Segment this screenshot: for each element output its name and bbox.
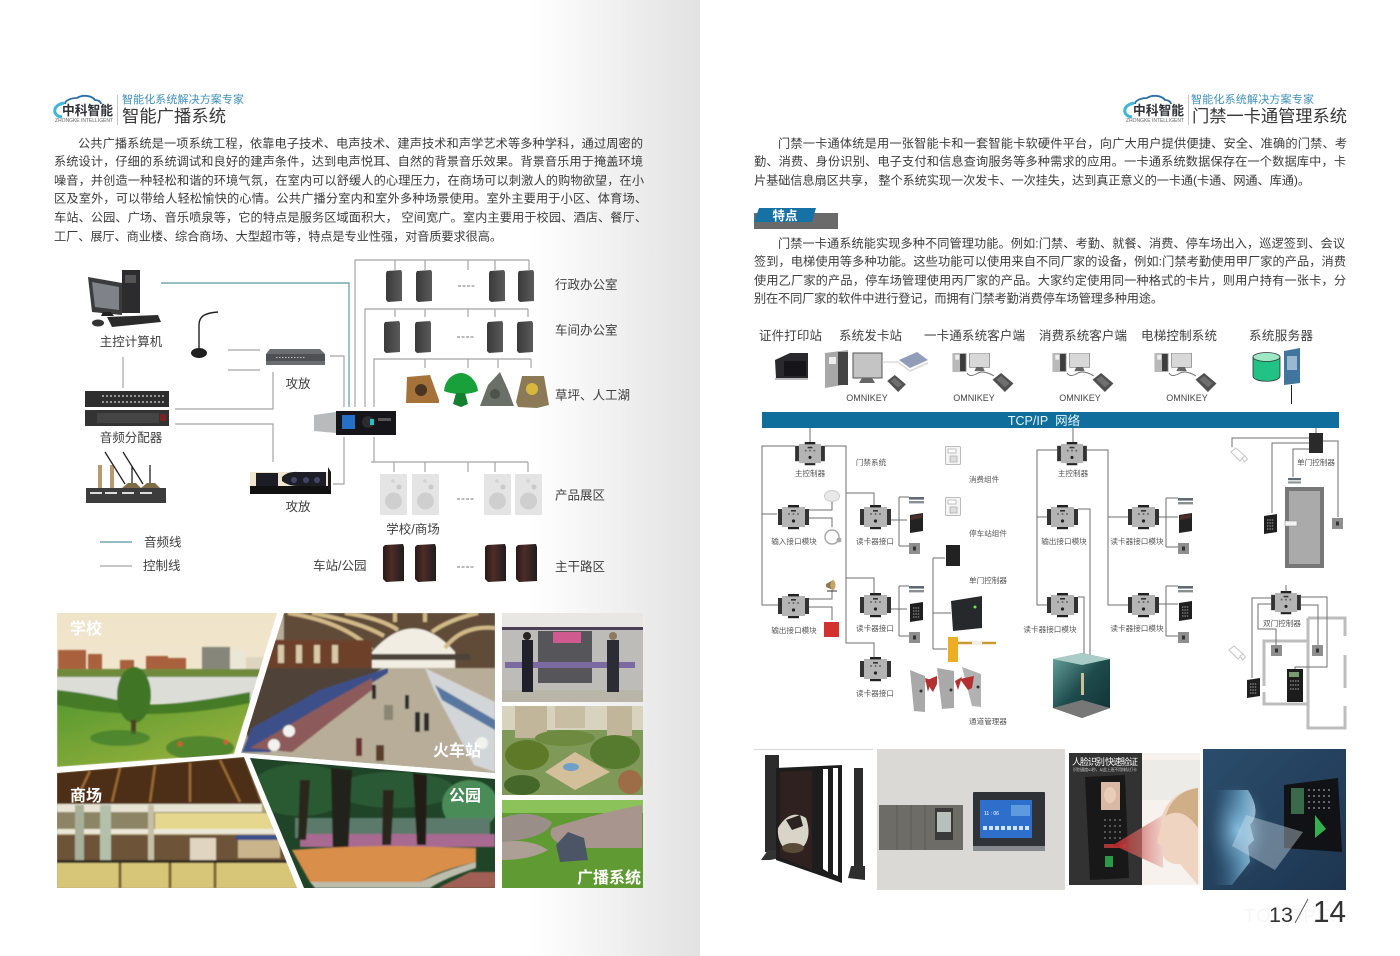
page number — [1269, 894, 1346, 929]
label: workshop office: 车间办公室 — [555, 322, 618, 338]
right logo: 中科智能 — [1125, 95, 1189, 125]
left intro paragraph: 公共广播系统是一项系统工程，依靠电子技术、电声技术、建声技术和声学艺术等多种学科，通过周密的 — [78, 136, 643, 150]
speakers: administration office — [386, 270, 534, 302]
label: access system: 门禁系统 — [856, 457, 887, 467]
photo: swing gate — [754, 749, 873, 883]
label: product showroom: 产品展区 — [555, 488, 605, 502]
photo: biometric device — [1203, 749, 1346, 890]
label: lawn and lake: 草坪、人工湖 — [555, 388, 630, 402]
right intro paragraph: 勤、消费、身份识别、电子支付和信息查询服务等多种需求的应用。一卡通系统数据保存在一个数据库中，卡 — [754, 154, 1346, 168]
label: 公园: 公园 — [449, 788, 481, 805]
page number: 13 — [1269, 903, 1293, 927]
legend: line types: 控制线 — [143, 559, 181, 573]
broadcast system diagram — [85, 260, 630, 582]
icon: camera 2 — [1229, 646, 1246, 660]
station labels: 电梯控制系统 — [1141, 329, 1217, 343]
photo: face recognition terminal: 人脸识别 快速验证 — [1072, 756, 1138, 767]
access control diagram: elevator group — [1023, 428, 1193, 718]
photo: residential garden — [502, 706, 643, 795]
label: output module: 输出接口模块 — [771, 625, 817, 635]
photo: face recognition terminal: 识别速度≤1秒，从此上班不用排队打卡 — [1073, 766, 1137, 772]
label: main computer: 主控计算机 — [100, 334, 163, 349]
controller: reader module bottom — [1128, 593, 1159, 617]
station labels: 证件打印站 — [759, 329, 822, 343]
label: reader interface 1: 读卡器接口 — [856, 536, 894, 546]
left intro paragraph: 噪音，并创造一种轻松和谐的环境气氛，在室内可以舒缓人的心理压力，在商场可以刺激人的购物欲望，在小 — [54, 172, 644, 188]
label: reader module top: 读卡器接口模块 — [1110, 536, 1164, 546]
controller: reader interface 3 — [860, 657, 891, 681]
icon: turnstiles — [910, 667, 981, 712]
right intro paragraph: 片基础信息扇区共享， 整个系统实现一次发卡、一次挂失，达到真正意义的一卡通(卡通、网通、库通)。 — [754, 172, 1310, 188]
left logo: 中科智能: 中科智能 — [62, 103, 113, 118]
icons: input and output peripherals — [824, 490, 842, 637]
speakers: lawn decorations — [406, 372, 549, 408]
double door walls — [1264, 618, 1345, 728]
TCP/IP network band — [762, 412, 1339, 428]
speakers: wood column speakers — [383, 544, 537, 582]
photo collage: application scenes — [57, 613, 643, 889]
panel: right page — [754, 92, 1347, 929]
icon: system server — [1253, 348, 1300, 404]
client stations row — [759, 328, 1313, 404]
label: main controller: 主控制器 — [1058, 468, 1089, 478]
speakers: workshop office — [384, 321, 533, 353]
label: school and mall: 学校/商场 — [386, 522, 440, 536]
label: administration office: 行政办公室 — [555, 277, 618, 292]
label: station and park: 车站/公园 — [313, 558, 366, 573]
photo: shopping mall — [57, 757, 302, 889]
label: 火车站: 火车站 — [433, 741, 481, 760]
icon: central controller — [314, 411, 396, 435]
left intro paragraph: 车站、公园、广场、音乐喷泉等，它的特点是服务区域面积大， 空间宽广。室内主要用于校园、酒店、餐厅、 — [54, 210, 647, 224]
photo: wall control panel — [877, 749, 1065, 890]
left logo: 中科智能: ZHONGKE INTELLIGENT — [55, 118, 114, 124]
icons: double door peripherals — [1247, 645, 1323, 702]
controller: reader module top — [1128, 505, 1159, 529]
TCP/IP network band: TCP/IP 网络 — [1008, 413, 1081, 428]
icon: parking barrier — [948, 637, 996, 662]
label: reader interface 3: 读卡器接口 — [856, 688, 894, 698]
photo: train station — [240, 613, 496, 778]
right intro paragraph — [754, 136, 1347, 188]
legend: line types: 音频线 — [144, 534, 182, 550]
features paragraph: 别在不同厂家的软件中进行登记，而拥有门禁考勤消费停车场管理多种用途。 — [754, 290, 1163, 306]
controller: reader interface 2 — [860, 593, 891, 617]
icons: single door peripherals — [1264, 478, 1343, 534]
single door wiring — [1232, 428, 1338, 517]
icon: card printer — [775, 353, 808, 380]
photo: rock speaker — [502, 800, 643, 888]
icon: single door controller — [1309, 433, 1323, 453]
right title: 门禁一卡通管理系统 — [1192, 106, 1347, 126]
features paragraph: 使用乙厂家的产品，停车场管理使用丙厂家的产品。大家约定使用同一种格式的卡片，则用户持有一张卡，分 — [754, 272, 1346, 288]
icon: door — [1285, 487, 1324, 568]
photo: wall control panel: 11 : 06 — [984, 811, 999, 817]
right logo: 中科智能: ZHONGKE INTELLIGENT — [1126, 118, 1185, 124]
photo: subway platform — [502, 613, 643, 702]
icon: audio splitter — [85, 391, 169, 426]
legend: line types — [100, 534, 182, 573]
icon: card client PC — [952, 353, 1013, 403]
label: consumption components: 消费组件 — [969, 474, 1000, 484]
label: reader module bottom: 读卡器接口模块 — [1110, 623, 1164, 633]
product photos — [754, 749, 1346, 890]
icon: consumption client PC: OMNIKEY — [1059, 393, 1101, 403]
section tag: 特点: 特点 — [772, 208, 798, 223]
label: amplifier 1: 攻放 — [285, 376, 311, 391]
label: single door controller: 单门控制器 — [969, 575, 1007, 585]
station labels: 系统服务器 — [1249, 328, 1313, 343]
label: main road area: 主干路区 — [555, 559, 605, 574]
photo: face recognition terminal — [1069, 753, 1200, 885]
controller: reader module left — [1047, 593, 1078, 617]
controller: main — [795, 442, 825, 465]
station labels: 一卡通系统客户端 — [924, 328, 1025, 343]
section tag: 特点 — [754, 208, 838, 229]
controller: output module — [1047, 505, 1078, 529]
access control diagram: left group — [762, 428, 1007, 726]
label: single door controller: 单门控制器 — [1297, 457, 1335, 467]
label: audio splitter: 音频分配器 — [100, 430, 163, 445]
icon: gooseneck microphone — [191, 312, 218, 358]
features paragraph: 门禁一卡通系统能实现多种不同管理功能。例如:门禁、考勤、就餐、消费、停车场出入，巡逻签到、会议 — [778, 236, 1345, 250]
label: reader interface 2: 读卡器接口 — [856, 623, 894, 633]
icon: camera — [1231, 448, 1248, 462]
label: input module: 输入接口模块 — [771, 536, 817, 546]
label: amplifier 2: 攻放 — [285, 499, 311, 514]
station labels: 消费系统客户端 — [1039, 328, 1127, 343]
icon: wireless microphones — [86, 452, 166, 503]
left title: 智能广播系统 — [122, 106, 226, 126]
photo: school — [57, 613, 277, 768]
icons: consumption terminals — [946, 446, 960, 516]
controller: output module — [778, 594, 809, 618]
wiring — [762, 428, 951, 657]
icon: elevator car — [1053, 653, 1110, 718]
audio line — [161, 283, 349, 407]
label: output module: 输出接口模块 — [1041, 536, 1087, 546]
icon: card issuing PC: OMNIKEY — [846, 393, 888, 403]
left intro paragraph: 区及室外，可以带给人轻松愉快的心情。公共广播分室内和室外多种场景使用。室外主要用于小区、体育场、 — [54, 190, 647, 206]
controller: double door — [1271, 591, 1301, 614]
station labels: 系统发卡站 — [839, 328, 902, 343]
control lines — [123, 260, 531, 484]
controller: reader interface 1 — [860, 505, 891, 529]
features paragraph — [754, 236, 1346, 306]
left intro paragraph: 工厂、展厅、商业楼、综合商场、大型超市等，特点是专业性强，对音质要求很高。 — [54, 228, 502, 244]
label: main controller: 主控制器 — [795, 468, 826, 478]
access control diagram: door examples — [1229, 428, 1345, 728]
right logo: 中科智能: 中科智能 — [1133, 103, 1184, 118]
icons: reader devices — [1178, 498, 1193, 643]
label: double door controller: 双门控制器 — [1263, 618, 1301, 628]
page number: 14 — [1313, 894, 1346, 929]
label: parking components: 停车站组件 — [969, 528, 1007, 538]
icon: parking reader — [946, 545, 960, 566]
photo: park — [250, 758, 498, 889]
controller: main — [1057, 442, 1087, 465]
double door wiring — [1252, 585, 1327, 678]
icon: amplifier 1 — [266, 349, 325, 365]
features paragraph: 签到，电梯使用等多种功能。这些功能可以使用来自不同厂家的设备，例如:门禁考勤使用甲厂家的产品，消费 — [754, 254, 1346, 268]
wiring — [1037, 428, 1178, 657]
right intro paragraph: 门禁一卡通体统是用一张智能卡和一套智能卡软硬件平台，向广大用户提供便捷、安全、准确的门禁、考 — [778, 136, 1347, 150]
icon: consumption client PC — [1052, 353, 1113, 403]
left intro paragraph: 系统设计，仔细的系统调试和良好的建声条件，达到电声悦耳、自然的背景音乐效果。背景音乐用于掩盖环境 — [54, 154, 643, 168]
label: 学校: 学校 — [70, 619, 102, 638]
left intro paragraph — [54, 136, 647, 244]
controller: input module — [778, 505, 809, 529]
label: reader module left: 读卡器接口模块 — [1023, 624, 1077, 634]
icon: amplifier 2 — [250, 467, 331, 494]
icon: card issuing PC — [825, 350, 928, 403]
icons: reader devices — [909, 497, 924, 643]
label: 商场: 商场 — [70, 787, 102, 805]
icon: main computer — [88, 270, 161, 327]
station labels — [759, 328, 1313, 343]
watermark: TOOOPEN — [1244, 906, 1344, 926]
icon: card client PC: OMNIKEY — [953, 393, 995, 403]
icon: elevator control PC — [1154, 353, 1216, 403]
icon: elevator control PC: OMNIKEY — [1166, 393, 1208, 403]
label: 广播系统: 广播系统 — [577, 868, 641, 887]
label: channel manager: 通道管理器 — [969, 716, 1007, 726]
speakers: white wall speakers — [380, 474, 542, 515]
icon: long range reader — [951, 596, 982, 631]
panel: left page — [54, 92, 647, 889]
left logo: 中科智能 — [55, 95, 118, 125]
left slogan: 智能化系统解决方案专家 — [122, 92, 244, 106]
right slogan: 智能化系统解决方案专家 — [1191, 92, 1314, 106]
